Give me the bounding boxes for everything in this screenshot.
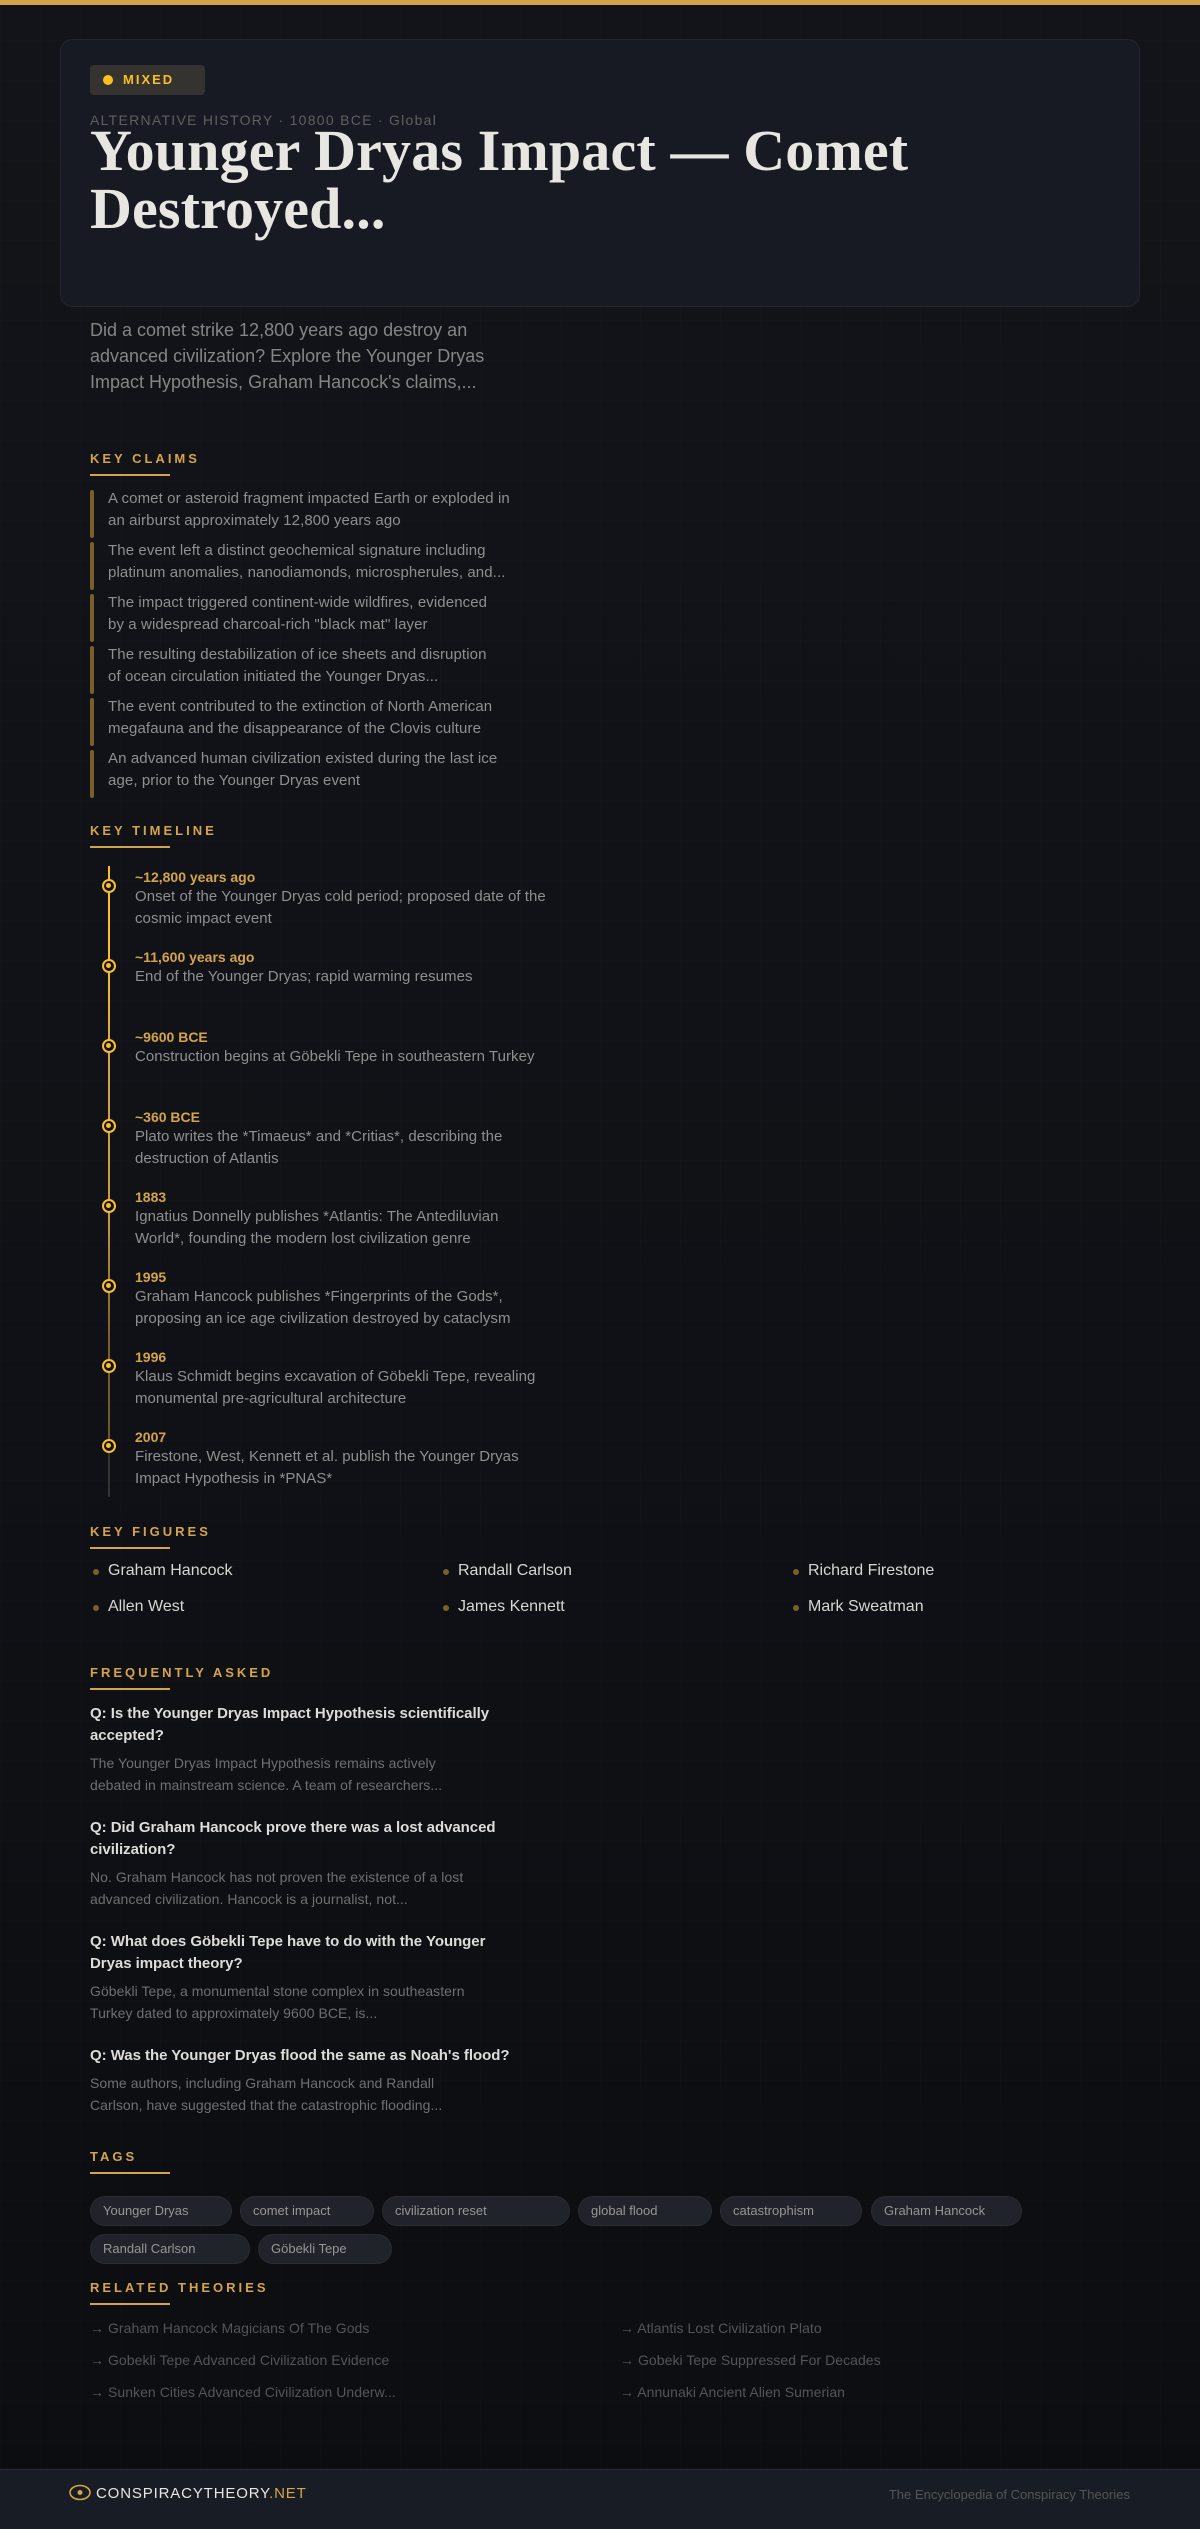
figure: James Kennett: James Kennett (458, 1598, 565, 1615)
tag (258, 2234, 392, 2264)
link: → Gobekli Tepe Advanced Civilization Evidence (90, 2352, 389, 2368)
tag: Randall Carlson (103, 2241, 196, 2256)
FAQ 2: civilization? (90, 1841, 175, 1858)
event: 360 BCE: ~360 BCE (135, 1109, 200, 1125)
FAQ 2: No. Graham Hancock has not proven the existence of a lost (90, 1869, 463, 1885)
FAQ 3: Göbekli Tepe, a monumental stone complex in southeastern (90, 1983, 465, 1999)
claim 3: by a widespread charcoal-rich "black mat" layer (108, 616, 428, 633)
description: Impact Hypothesis, Graham Hancock's claims,... (90, 372, 477, 392)
top accent bar (0, 0, 1200, 5)
timeline spine (108, 866, 110, 1497)
FAQ 1 (90, 1705, 489, 1793)
event: 2007 (102, 1429, 519, 1487)
FAQ 1: accepted? (90, 1727, 164, 1744)
footer (0, 2469, 1200, 2529)
event: 1996: Klaus Schmidt begins excavation of Göbekli Tepe, revealing (135, 1368, 535, 1385)
tag (240, 2196, 374, 2226)
link: → Annunaki Ancient Alien Sumerian (620, 2384, 845, 2400)
event: 360 BCE: Plato writes the *Timaeus* and *Critias*, describing the (135, 1128, 502, 1145)
event: 1883 (102, 1189, 499, 1247)
description: Did a comet strike 12,800 years ago destroy an (90, 320, 467, 340)
heading: related theories: RELATED THEORIES (90, 2280, 268, 2295)
claim 3 (90, 594, 487, 642)
FAQ 1: The Younger Dryas Impact Hypothesis remains actively (90, 1755, 436, 1771)
claim 1: A comet or asteroid fragment impacted Earth or exploded in (108, 490, 510, 507)
description (90, 320, 484, 392)
badge label: MIXED (123, 72, 174, 87)
event: 2007: Firestone, West, Kennett et al. publish the Younger Dryas (135, 1448, 519, 1465)
panel: hero (60, 39, 1140, 307)
heading: key figures: KEY FIGURES (90, 1524, 211, 1539)
panel: FAQ (90, 1705, 509, 2113)
heading: key claims: KEY CLAIMS (90, 451, 200, 466)
panel: tags (90, 2196, 1022, 2264)
event: 360 BCE: destruction of Atlantis (135, 1150, 279, 1167)
tag: comet impact (253, 2203, 330, 2218)
event: 1996: 1996 (135, 1349, 166, 1365)
tagline: The Encyclopedia of Conspiracy Theories (889, 2487, 1130, 2502)
tag (90, 2196, 232, 2226)
event: 360 BCE (102, 1109, 502, 1167)
panel: key figures (93, 1562, 934, 1615)
event: 12,800 years ago: ~12,800 years ago (135, 869, 255, 885)
link: → Graham Hancock Magicians Of The Gods (90, 2320, 369, 2336)
event: 1995 (102, 1269, 510, 1327)
event: 2007: Impact Hypothesis in *PNAS* (135, 1470, 332, 1487)
event: 11,600 years ago: End of the Younger Dryas; rapid warming resumes (135, 968, 473, 985)
claim 2: platinum anomalies, nanodiamonds, microspherules, and... (108, 564, 505, 581)
event: 9600 BCE (102, 1029, 535, 1065)
claim 2: The event left a distinct geochemical signature including (108, 542, 486, 559)
tag (90, 2234, 250, 2264)
FAQ 2: Q: Did Graham Hancock prove there was a lost advanced (90, 1819, 496, 1836)
claim 4: of ocean circulation initiated the Younger Dryas... (108, 668, 438, 685)
icon: status dot (103, 75, 113, 85)
figure: Randall Carlson: Randall Carlson (458, 1562, 572, 1579)
FAQ 3: Turkey dated to approximately 9600 BCE, is... (90, 2005, 377, 2021)
badge: mixed verdict (90, 65, 205, 95)
event: 11,600 years ago (102, 949, 473, 985)
meta line: ALTERNATIVE HISTORY · 10800 BCE · Global (90, 112, 437, 128)
event: 1996: monumental pre-agricultural architecture (135, 1390, 406, 1407)
tag: global flood (591, 2203, 658, 2218)
event: 1883: Ignatius Donnelly publishes *Atlantis: The Antediluvian (135, 1208, 499, 1225)
figure: Mark Sweatman: Mark Sweatman (808, 1598, 924, 1615)
claim 4 (90, 646, 487, 694)
heading: key timeline: KEY TIMELINE (90, 823, 217, 838)
FAQ 3: Dryas impact theory? (90, 1955, 243, 1972)
claim 2 (90, 542, 505, 590)
FAQ 1: debated in mainstream science. A team of researchers... (90, 1777, 442, 1793)
event: 2007: 2007 (135, 1429, 166, 1445)
FAQ 4: Carlson, have suggested that the catastrophic flooding... (90, 2097, 442, 2113)
event: 9600 BCE: Construction begins at Göbekli Tepe in southeastern Turkey (135, 1048, 535, 1065)
FAQ 4 (90, 2047, 509, 2113)
link: → Gobeki Tepe Suppressed For Decades (620, 2352, 881, 2368)
icon: eye logo (69, 2484, 91, 2500)
heading: tags: TAGS (90, 2149, 137, 2164)
title: Destroyed... (90, 176, 386, 241)
claim 1: an airburst approximately 12,800 years ago (108, 512, 401, 529)
logo wordmark: CONSPIRACYTHEORY.NET (96, 2485, 307, 2502)
FAQ 1: Q: Is the Younger Dryas Impact Hypothesis scientifically (90, 1705, 489, 1722)
claim 5 (90, 698, 492, 746)
event: 1995: 1995 (135, 1269, 166, 1285)
chart: timeline (102, 866, 546, 1497)
event: 1883: 1883 (135, 1189, 166, 1205)
event: 1996 (102, 1349, 535, 1407)
event: 1995: Graham Hancock publishes *Fingerprints of the Gods*, (135, 1288, 503, 1305)
tag (720, 2196, 862, 2226)
FAQ 4: Q: Was the Younger Dryas flood the same as Noah's flood? (90, 2047, 509, 2064)
claim 3: The impact triggered continent-wide wildfires, evidenced (108, 594, 487, 611)
claim 6: An advanced human civilization existed during the last ice (108, 750, 497, 767)
event: 12,800 years ago: cosmic impact event (135, 910, 272, 927)
tag: catastrophism (733, 2203, 814, 2218)
FAQ 4: Some authors, including Graham Hancock and Randall (90, 2075, 434, 2091)
claim 5: The event contributed to the extinction of North American (108, 698, 492, 715)
event: 12,800 years ago (102, 869, 546, 927)
title (90, 118, 908, 241)
link: → Sunken Cities Advanced Civilization Underw... (90, 2384, 396, 2400)
event: 1883: World*, founding the modern lost civilization genre (135, 1230, 471, 1247)
FAQ 3 (90, 1933, 486, 2021)
heading: frequently asked: FREQUENTLY ASKED (90, 1665, 273, 1680)
event: 1995: proposing an ice age civilization destroyed by cataclysm (135, 1310, 510, 1327)
claim 1 (90, 490, 510, 538)
tag: civilization reset (395, 2203, 487, 2218)
panel: key claims list (90, 490, 510, 798)
figure: Richard Firestone: Richard Firestone (808, 1562, 934, 1579)
claim 6: age, prior to the Younger Dryas event (108, 772, 360, 789)
event: 9600 BCE: ~9600 BCE (135, 1029, 208, 1045)
event: 11,600 years ago: ~11,600 years ago (135, 949, 254, 965)
figure: Graham Hancock: Graham Hancock (108, 1562, 232, 1579)
tag: Graham Hancock (884, 2203, 985, 2218)
claim 6 (90, 750, 497, 798)
tag (382, 2196, 570, 2226)
title: Younger Dryas Impact — Comet (90, 118, 908, 183)
tag (578, 2196, 712, 2226)
tag (871, 2196, 1022, 2226)
link: → Atlantis Lost Civilization Plato (620, 2320, 822, 2336)
claim 5: megafauna and the disappearance of the Clovis culture (108, 720, 481, 737)
FAQ 2: advanced civilization. Hancock is a journalist, not... (90, 1891, 408, 1907)
tag: Göbekli Tepe (271, 2241, 347, 2256)
tag: Younger Dryas (103, 2203, 189, 2218)
FAQ 3: Q: What does Göbekli Tepe have to do with the Younger (90, 1933, 485, 1950)
panel: related theories (90, 2320, 881, 2400)
figure: Allen West: Allen West (108, 1598, 184, 1615)
description: advanced civilization? Explore the Younger Dryas (90, 346, 484, 366)
event: 12,800 years ago: Onset of the Younger Dryas cold period; proposed date of the (135, 888, 546, 905)
claim 4: The resulting destabilization of ice sheets and disruption (108, 646, 487, 663)
FAQ 2 (90, 1819, 496, 1907)
